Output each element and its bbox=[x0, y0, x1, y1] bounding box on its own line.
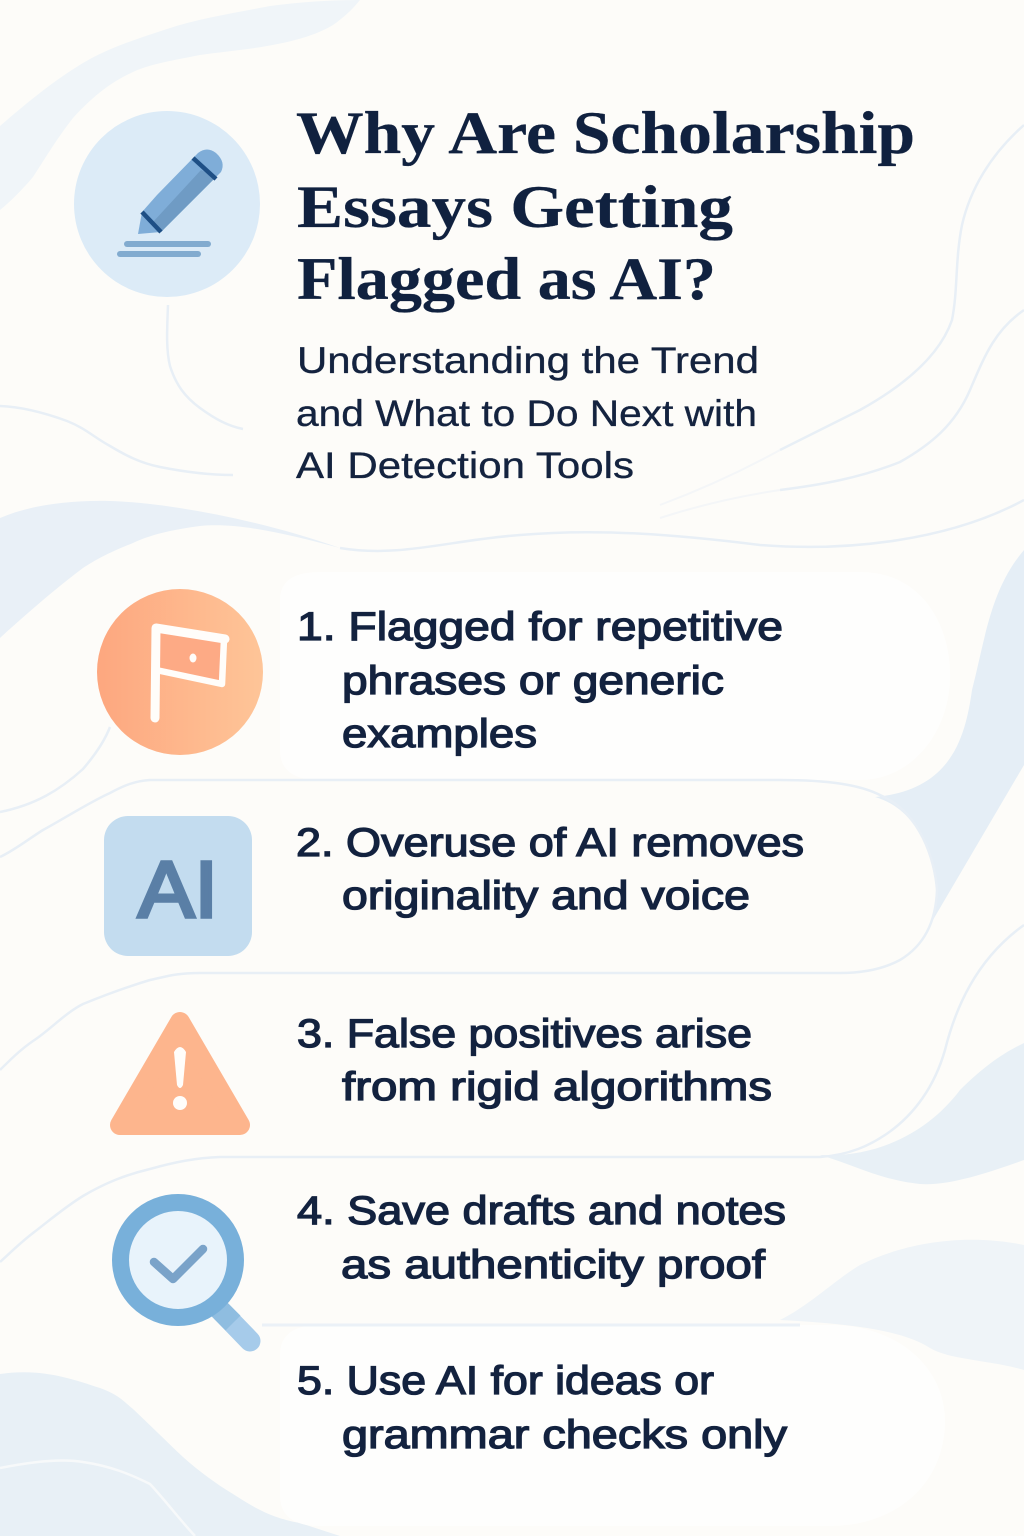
item 5: 5. Use AI for ideas or bbox=[297, 1359, 714, 1403]
item 2: 2. Overuse of AI removes bbox=[296, 821, 804, 865]
title bbox=[296, 100, 915, 312]
item 2 bbox=[296, 821, 804, 918]
item 2: originality and voice bbox=[342, 874, 750, 918]
item 1: 1. Flagged for repetitive bbox=[297, 605, 783, 649]
item 3: 3. False positives arise bbox=[297, 1012, 752, 1056]
icon: warning triangle bbox=[120, 1022, 240, 1125]
title: Essays Getting bbox=[297, 174, 733, 240]
icon: magnifier with check bbox=[120, 1202, 250, 1341]
item 4: 4. Save drafts and notes bbox=[297, 1189, 786, 1233]
item 4 bbox=[297, 1189, 786, 1287]
item 3: from rigid algorithms bbox=[342, 1065, 772, 1109]
subtitle: Understanding the Trend bbox=[297, 340, 759, 381]
subtitle: and What to Do Next with bbox=[296, 393, 757, 434]
icon: AI badge: AI bbox=[138, 845, 218, 934]
item 5: grammar checks only bbox=[342, 1413, 787, 1457]
item 1: phrases or generic bbox=[342, 659, 724, 703]
pen icon bbox=[74, 111, 260, 297]
title: Why Are Scholarship bbox=[296, 100, 915, 166]
icon: flag bbox=[97, 589, 263, 755]
subtitle bbox=[296, 340, 759, 486]
item 1 bbox=[297, 605, 783, 756]
item 3 bbox=[297, 1012, 772, 1109]
icon: AI badge bbox=[104, 816, 252, 956]
item 4: as authenticity proof bbox=[341, 1243, 766, 1287]
title: Flagged as AI? bbox=[297, 246, 716, 312]
item 5 bbox=[297, 1359, 787, 1457]
subtitle: AI Detection Tools bbox=[296, 445, 634, 486]
item 1: examples bbox=[342, 712, 537, 756]
